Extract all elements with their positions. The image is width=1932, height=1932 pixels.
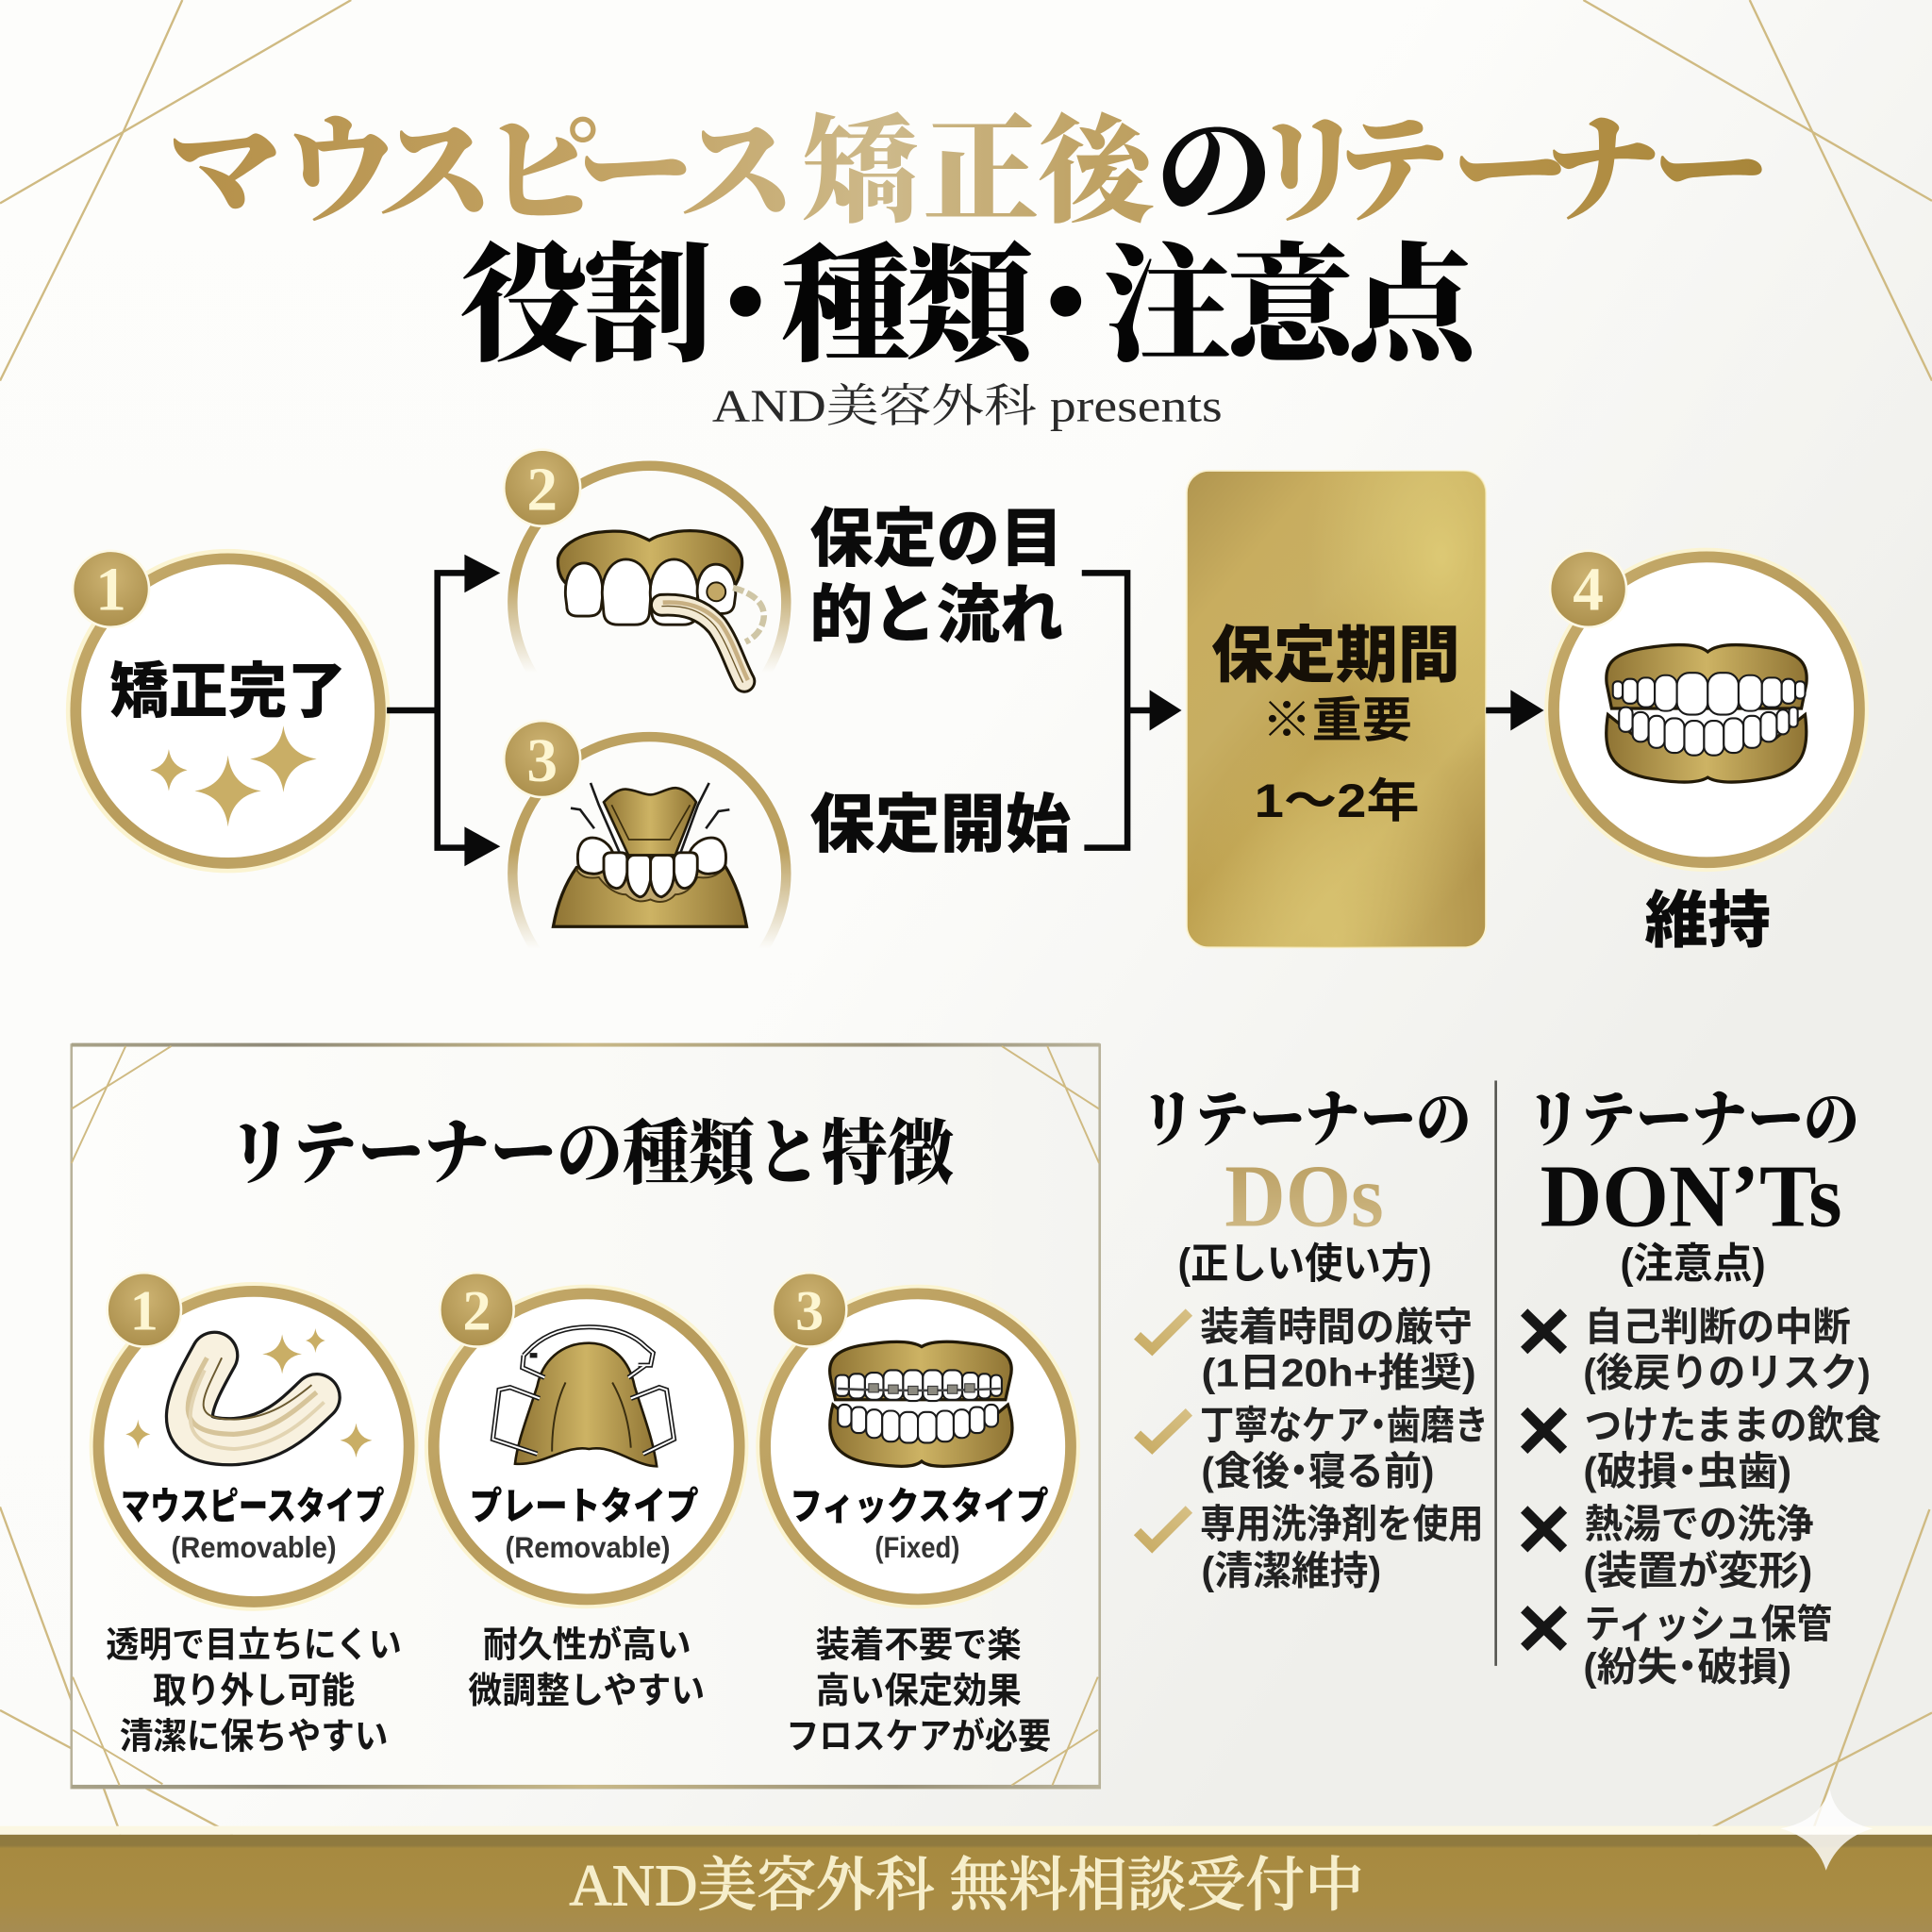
DO item 1: (1日20h+推奨) [1201, 1350, 1476, 1394]
step 1: correction complete [73, 551, 381, 864]
DOs heading: (正しい使い方) [1178, 1241, 1432, 1287]
DO item 1: 装着時間の厳守 [1200, 1305, 1473, 1349]
title: 役割・種類・注意点 [459, 237, 1487, 378]
panel: DOs [1138, 1087, 1489, 1593]
DON'T item 3 [1524, 1502, 1814, 1593]
DON'Ts heading: (注意点) [1621, 1241, 1766, 1287]
DO item 3 [1138, 1502, 1484, 1593]
DON'T item 1: 自己判断の中断 [1585, 1305, 1851, 1349]
badge 3 [504, 721, 580, 797]
type sublabel: (Removable) [172, 1531, 337, 1564]
title [166, 108, 1770, 378]
DO item 2 [1138, 1404, 1489, 1493]
retention period card: ※重要 [1261, 693, 1412, 747]
icon: clear mouthpiece [188, 1356, 325, 1449]
type 2 description: 耐久性が高い [483, 1626, 691, 1666]
DOs heading: DOs [1224, 1148, 1384, 1246]
DO item 3: (清潔維持) [1201, 1549, 1381, 1593]
badge [440, 1273, 514, 1347]
badge 1: 1 [95, 557, 126, 625]
DOs heading: リテーナーの [1140, 1087, 1472, 1155]
step 3: retention start [504, 721, 786, 1010]
step 2 label: 的と流れ [809, 580, 1063, 651]
icon: sparkle [1780, 1789, 1873, 1871]
type 1 description: 取り外し可能 [153, 1672, 355, 1711]
type 1 description: 清潔に保ちやすい [120, 1717, 388, 1757]
sparkles [125, 1328, 372, 1457]
badge [773, 1273, 846, 1347]
badge: 2 [462, 1278, 491, 1341]
step 1 label: 矯正完了 [109, 658, 346, 725]
step 2: purpose and flow [504, 450, 786, 740]
badge: 3 [795, 1278, 824, 1341]
step 3 label: 保定開始 [809, 790, 1071, 860]
DON'T item 1: (後戻りのリスク) [1583, 1350, 1871, 1394]
DON'T item 2 [1524, 1404, 1881, 1493]
connector: step 1 to steps 2 and 3 [387, 555, 500, 866]
panel heading: リテーナーの種類と特徴 [226, 1115, 954, 1194]
DON'Ts heading: DON’Ts [1541, 1148, 1842, 1246]
retention period card: 1～2年 [1255, 774, 1420, 827]
badge 2: 2 [526, 457, 558, 525]
badge 2 [504, 450, 580, 526]
DON'T item 4: ティッシュ保管 [1585, 1602, 1832, 1646]
DON'T item 1 [1524, 1305, 1871, 1394]
type label: マウスピースタイプ [121, 1484, 385, 1527]
type 2 description [468, 1626, 705, 1711]
DON'Ts heading: リテーナーの [1525, 1087, 1859, 1155]
panel: DON'Ts [1524, 1087, 1881, 1690]
type 3 description: 高い保定効果 [816, 1672, 1022, 1711]
step 4: maintenance [1550, 551, 1859, 862]
DOs heading [1140, 1087, 1472, 1287]
DO item 3: 専用洗浄剤を使用 [1200, 1502, 1484, 1546]
panel: retainer types [72, 1043, 1100, 1789]
badge 1 [73, 551, 149, 627]
type sublabel: (Removable) [506, 1531, 671, 1564]
sparkles [150, 725, 317, 826]
type label: フィックスタイプ [790, 1484, 1049, 1527]
type 2: plate [434, 1273, 740, 1599]
DON'T item 2: (破損・虫歯) [1583, 1449, 1791, 1493]
badge: 1 [130, 1278, 158, 1341]
retention period card: 保定期間 [1211, 621, 1460, 690]
DON'T item 4: (紛失・破損) [1583, 1645, 1791, 1690]
arrow to step 4 [1486, 690, 1544, 731]
badge 3: 3 [526, 727, 558, 795]
DON'T item 3: 熱湯での洗浄 [1585, 1502, 1814, 1546]
title: マウスピース矯正後のリテーナー [166, 108, 1770, 238]
type 3 description: フロスケアが必要 [786, 1717, 1051, 1757]
footer text: AND美容外科 無料相談受付中 [569, 1852, 1364, 1918]
retention period card [1187, 471, 1486, 947]
badge 4: 4 [1573, 557, 1604, 625]
type 1 description [106, 1626, 402, 1757]
icon: plate retainer [492, 1327, 674, 1466]
type 1 description: 透明で目立ちにくい [106, 1626, 402, 1666]
DON'T item 3: (装置が変形) [1583, 1549, 1812, 1593]
icon: lower teeth with plate [553, 783, 747, 926]
divider [1494, 1080, 1497, 1666]
step 2 label: 保定の目 [809, 504, 1063, 575]
subtitle: presents: AND美容外科 presents [712, 382, 1223, 432]
type 2 description: 微調整しやすい [468, 1672, 705, 1711]
DON'T item 2: つけたままの飲食 [1585, 1404, 1881, 1448]
badge 4 [1550, 551, 1626, 627]
type label: プレートタイプ [470, 1484, 699, 1527]
type 3 description [786, 1626, 1051, 1757]
bracket and arrow to retention card [1082, 573, 1182, 848]
type 3 description: 装着不要で楽 [816, 1626, 1022, 1666]
DON'Ts heading [1525, 1087, 1859, 1287]
DO item 1 [1138, 1305, 1476, 1394]
icon: full dentures [1607, 644, 1807, 782]
type sublabel: (Fixed) [874, 1531, 959, 1564]
step 4 label: 維持 [1645, 886, 1771, 955]
type 3: fixed [765, 1273, 1071, 1599]
icon: teeth with retainer [558, 531, 764, 683]
badge [108, 1273, 181, 1347]
DON'T item 4 [1524, 1602, 1832, 1690]
type 1: mouthpiece [98, 1273, 409, 1602]
DO item 2: (食後・寝る前) [1201, 1449, 1434, 1493]
footer bar [0, 1789, 1932, 1932]
icon: fixed retainer on teeth [830, 1341, 1012, 1466]
DO item 2: 丁寧なケア・歯磨き [1200, 1404, 1489, 1448]
